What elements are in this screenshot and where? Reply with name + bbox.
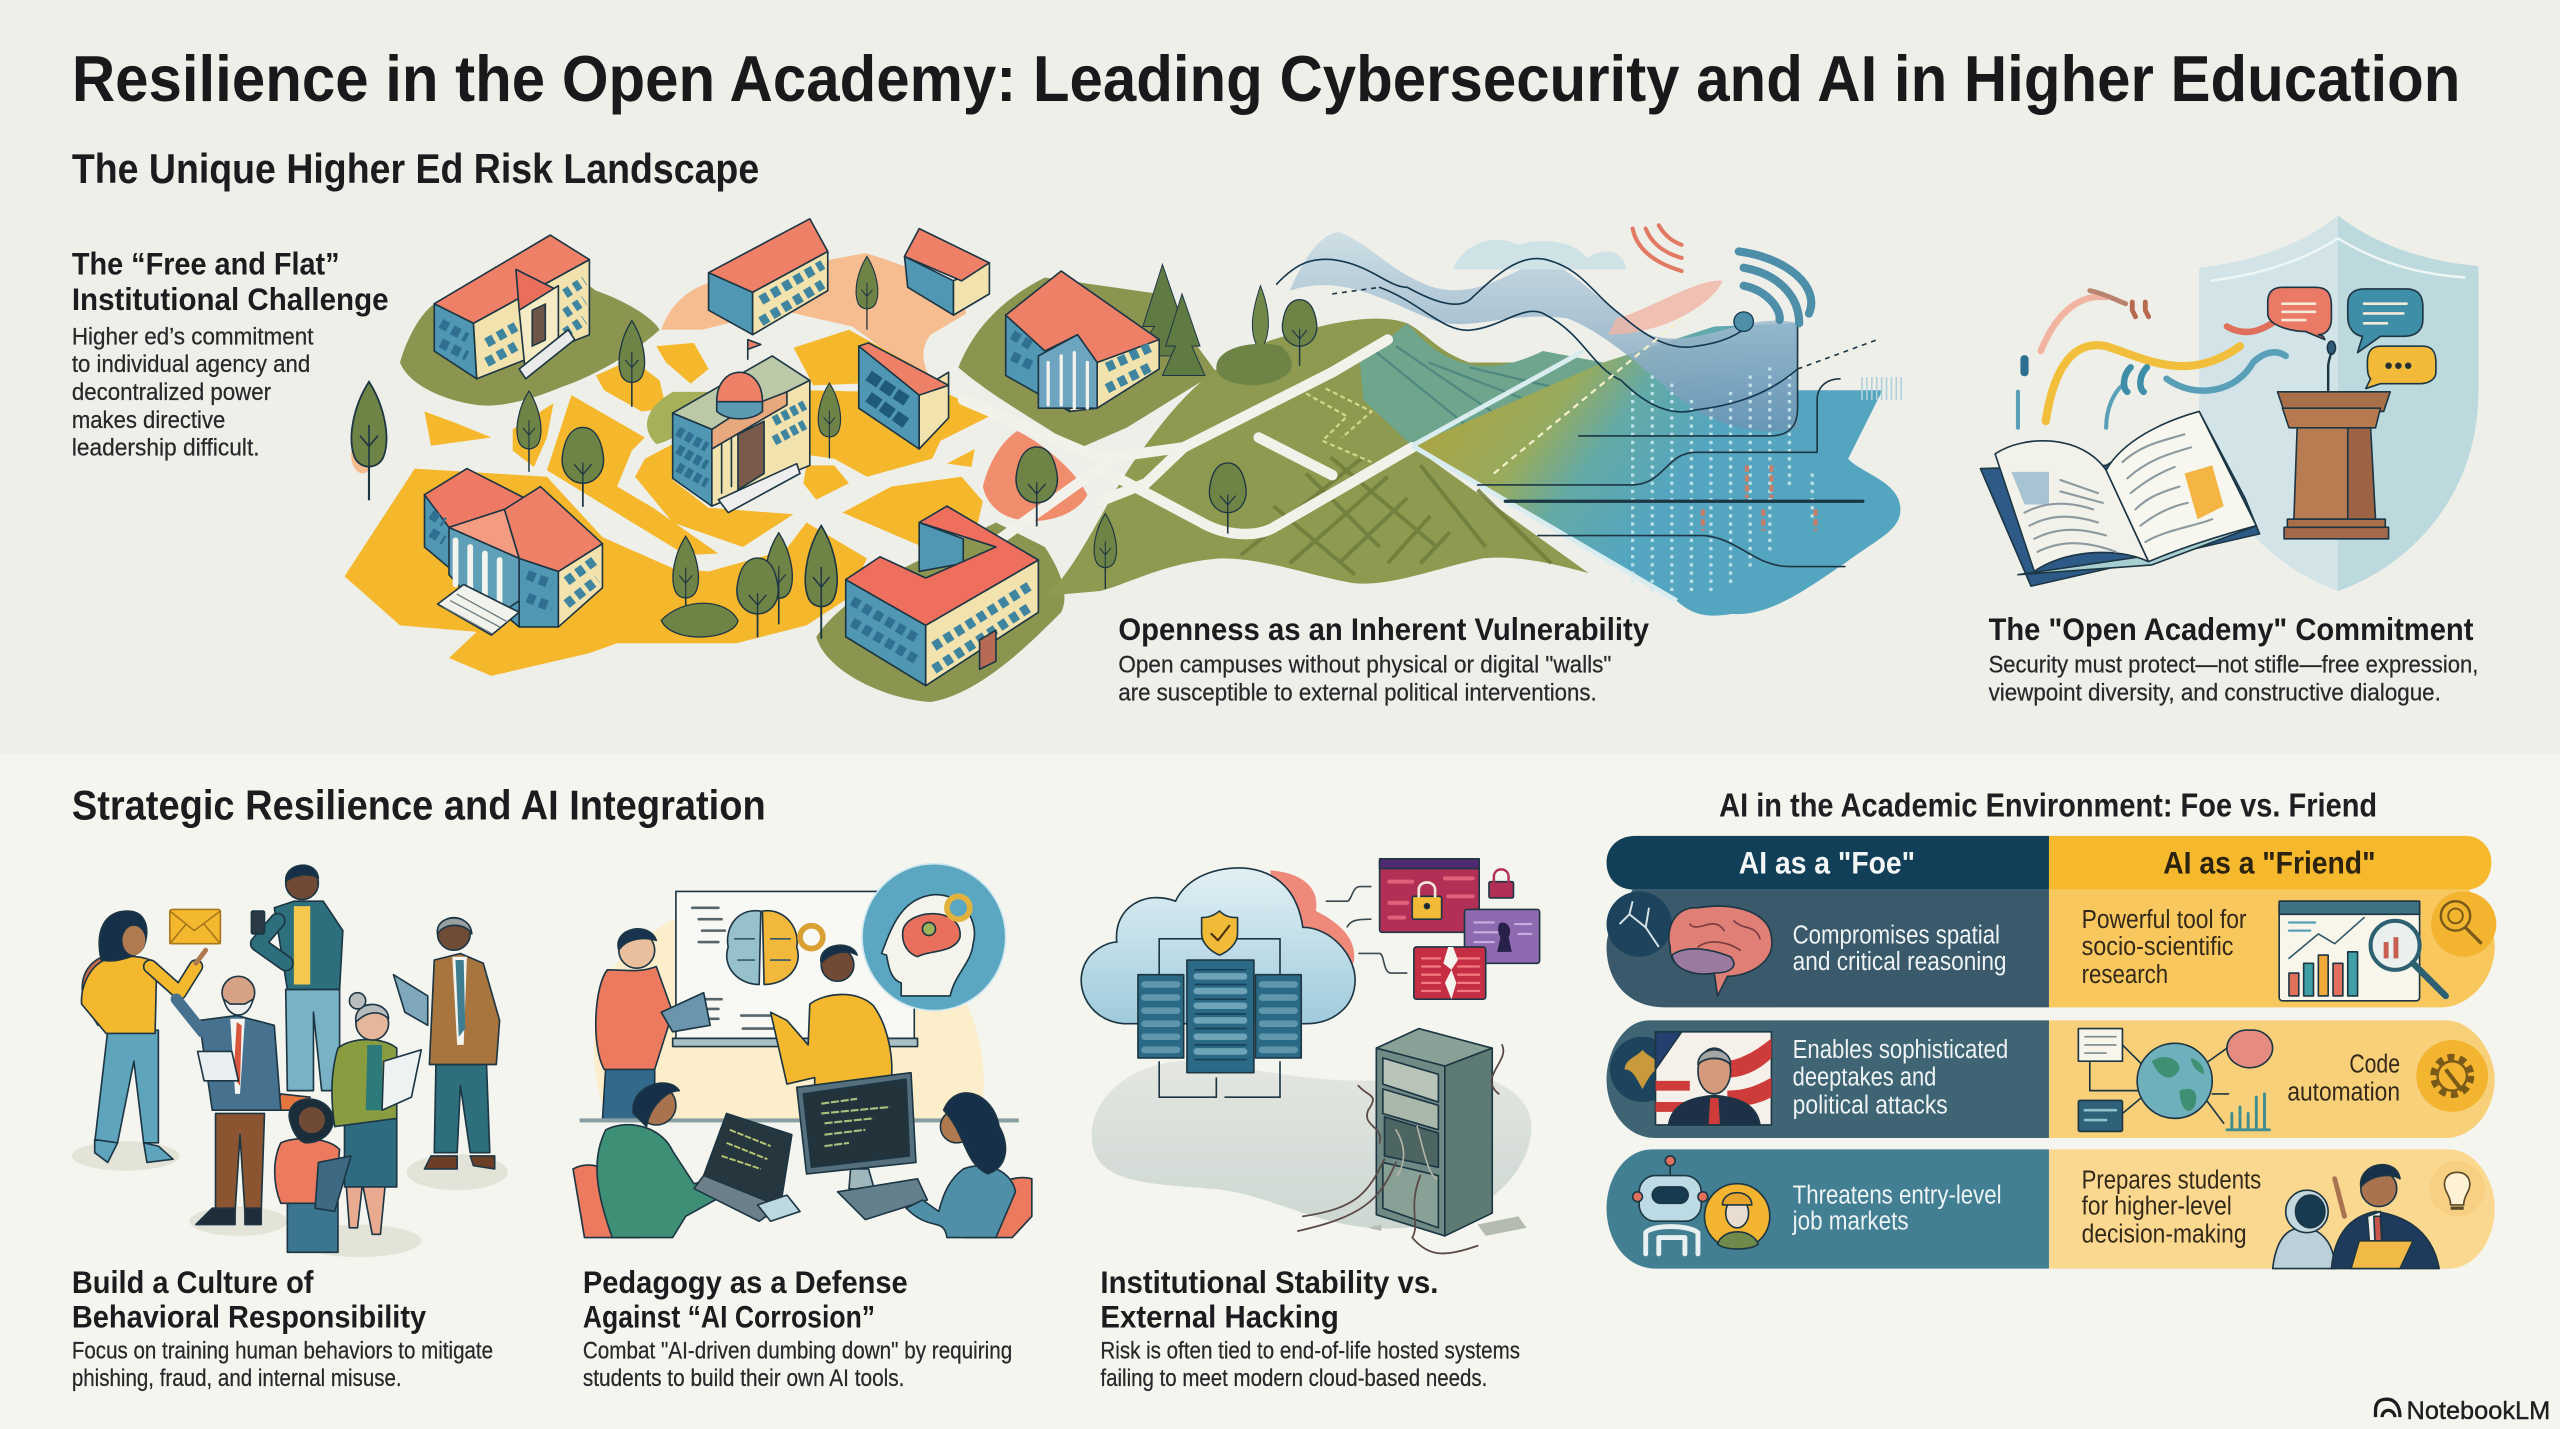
row 2: deeptakes and: [1793, 1064, 1936, 1092]
icon: deepfake portrait: [1656, 1032, 1771, 1125]
open book: [1980, 411, 2260, 586]
red cloud behind: [1270, 870, 1354, 980]
park roads: [963, 340, 1412, 542]
green hoodie student: [597, 1083, 718, 1238]
AI head badge: [862, 864, 1006, 1011]
comparison table: AI foe vs friend: [1607, 836, 2496, 1269]
wifi signal arcs: [1633, 225, 1811, 331]
NotebookLM logo: NotebookLM: [2407, 1397, 2550, 1425]
row 1: research: [2082, 961, 2168, 989]
grey ground blob: [1092, 1060, 1531, 1228]
speech bubbles: [2268, 287, 2436, 389]
girl in coral: [275, 1099, 351, 1252]
text block: open academy commitment: The "Open Academy" Commitment: [1989, 611, 2474, 647]
text block: behavioral responsibility: Behavioral Responsibility: [72, 1298, 426, 1334]
row 2: Code: [2349, 1051, 2400, 1079]
text block: openness as vulnerability: are susceptible to external political interventions.: [1118, 679, 1597, 706]
servers: [1138, 960, 1301, 1073]
olive ground patches: [400, 261, 1216, 702]
illustration: cloud versus legacy server: [1081, 859, 1540, 1253]
icon: gear: [2416, 1040, 2488, 1112]
yellow ground patches: [344, 330, 993, 676]
text block: pedagogy as defense: Against “AI Corrosion”: [583, 1298, 875, 1334]
whiteboard: [673, 891, 918, 1047]
text block: pedagogy as defense: Pedagogy as a Defense: [583, 1264, 908, 1300]
building: temple hall: [424, 469, 602, 635]
desktop monitor with code: [797, 1073, 916, 1192]
row 3: for higher-level: [2082, 1193, 2232, 1221]
purple keyhole window: [1464, 909, 1540, 963]
peach and coral ground: [661, 253, 967, 389]
icon: research chart: [2279, 901, 2446, 1001]
data lines: [1277, 259, 1878, 567]
building: east block: [859, 343, 949, 449]
icon: eagle seal: [1610, 1037, 1675, 1102]
text block: free and flat challenge: leadership difficult.: [72, 435, 260, 462]
row 3: Threatens entry-level: [1793, 1181, 2002, 1209]
row 2: [1607, 1020, 2495, 1138]
warm backdrop: [594, 891, 984, 1120]
woman at keyboard: [906, 1093, 1016, 1238]
row 3: job markets: [1792, 1207, 1909, 1235]
olive landscape hills: [1045, 319, 1603, 596]
binary rain dots: [1633, 367, 1812, 596]
signal dashes red: [1703, 465, 1816, 531]
text block: free and flat challenge: [72, 245, 389, 462]
row 1: Compromises spatial: [1793, 922, 2000, 950]
desk line: [580, 1118, 1019, 1122]
row 1: and critical reasoning: [1793, 948, 2007, 976]
row 1: [1607, 890, 2496, 1007]
icon: neural tree: [1607, 891, 1672, 957]
text block: institutional stability: [1100, 1264, 1520, 1392]
icon: worker: [1704, 1184, 1770, 1249]
flowing digital data region: [1412, 323, 1900, 616]
row 2: automation: [2287, 1078, 2400, 1106]
text block: institutional stability: Institutional Stability vs.: [1100, 1264, 1438, 1300]
envelope icon: [170, 909, 220, 944]
table header: AI as a "Foe": [1739, 845, 1915, 880]
text block: behavioral responsibility: [72, 1264, 493, 1392]
heading: strategic resilience: Strategic Resilience and AI Integration: [72, 782, 766, 829]
table header: [1607, 836, 2491, 890]
connector frames: [1159, 939, 1280, 1097]
building: domed central hall: [673, 340, 810, 513]
illustration: campus map dissolving into data: [344, 219, 1902, 702]
security shield check: [1202, 911, 1238, 955]
text block: open academy commitment: [1989, 611, 2478, 706]
text block: behavioral responsibility: Focus on training human behaviors to mitigate: [72, 1337, 493, 1364]
icon: magnifier: [2431, 891, 2496, 957]
chairs: [573, 1165, 1032, 1238]
row 1: socio-scientific: [2082, 933, 2234, 961]
row 3: [1607, 1149, 2495, 1269]
row 3: Prepares students: [2082, 1167, 2261, 1195]
swirling speech ribbons: [2018, 291, 2286, 428]
man in brown jacket with tablet: [393, 918, 500, 1169]
building: north hall: [709, 219, 828, 335]
building: small cottage: [904, 229, 989, 315]
background: lower section: [0, 754, 2560, 1429]
elder in blue jacket: [176, 976, 281, 1224]
trees: [351, 256, 1317, 639]
text block: free and flat challenge: decontralized power: [72, 379, 271, 406]
text block: free and flat challenge: The “Free and Flat”: [72, 245, 340, 281]
heading: foe vs friend table: AI in the Academic Environment: Foe vs. Friend: [1719, 787, 2377, 824]
illustration: shield, book and podium: [1980, 216, 2478, 591]
text block: institutional stability: Risk is often tied to end-of-life hosted systems: [1100, 1337, 1520, 1364]
row 2: political attacks: [1793, 1091, 1948, 1119]
text block: open academy commitment: viewpoint diversity, and constructive dialogue.: [1989, 679, 2441, 706]
icon: brain: [1669, 906, 1772, 996]
woman in yellow with backpack: [81, 911, 206, 1162]
text block: pedagogy as defense: [583, 1264, 1012, 1392]
cloud: [1081, 868, 1355, 1024]
logo mark: [2376, 1399, 2400, 1417]
crimson locked window: [1380, 859, 1479, 932]
illustration: people collaborating: [72, 865, 508, 1257]
icon: robot and manager: [2273, 1165, 2439, 1269]
teal striped terrain: [1360, 323, 1603, 447]
student pointing in yellow: [771, 945, 892, 1127]
row 2: Enables sophisticated: [1793, 1036, 2008, 1064]
text block: pedagogy as defense: students to build their own AI tools.: [583, 1365, 904, 1392]
older woman in green: [332, 993, 421, 1234]
keyboard and phone: [758, 1179, 927, 1221]
connector wires: [1326, 887, 1407, 973]
ground shadows: [72, 1141, 508, 1257]
text block: openness as vulnerability: Open campuses without physical or digital "walls": [1118, 652, 1611, 679]
text block: openness as vulnerability: Openness as an Inherent Vulnerability: [1118, 611, 1649, 647]
building: columned east hall: [1006, 271, 1159, 411]
text block: free and flat challenge: Institutional Challenge: [72, 281, 389, 317]
text block: pedagogy as defense: Combat "AI-driven dumbing down" by requiring: [583, 1337, 1012, 1364]
background: upper section: [0, 0, 2560, 754]
split brain: [727, 911, 823, 984]
text block: free and flat challenge: makes directive: [72, 407, 225, 434]
icon: robot: [1633, 1156, 1708, 1254]
icon: light bulb: [2429, 1161, 2485, 1216]
podium with microphone: [2278, 341, 2390, 539]
red cracked window: [1414, 947, 1486, 999]
illustration: classroom coding with AI: [573, 864, 1032, 1238]
farm field lines: [1241, 457, 1551, 575]
row 3: decision-making: [2082, 1220, 2247, 1248]
hooded student with laptop: [596, 929, 710, 1120]
data stream edge: [1412, 351, 1677, 601]
standing person with phone: [251, 865, 343, 1110]
text block: openness as vulnerability: [1118, 611, 1649, 706]
text block: open academy commitment: Security must protect—not stifle—free expression,: [1989, 652, 2478, 679]
text block: behavioral responsibility: phishing, fraud, and internal misuse.: [72, 1365, 402, 1392]
text block: institutional stability: failing to meet modern cloud-based needs.: [1100, 1365, 1487, 1392]
building: northwest hall: [434, 235, 589, 379]
table header: AI as a "Friend": [2163, 845, 2376, 880]
heading: risk landscape: The Unique Higher Ed Risk Landscape: [72, 145, 759, 192]
building: L-shaped south hall: [846, 506, 1038, 686]
text block: institutional stability: External Hacking: [1100, 1298, 1339, 1334]
text block: behavioral responsibility: Build a Culture of: [72, 1264, 314, 1300]
text block: free and flat challenge: Higher ed’s commitment: [72, 323, 314, 350]
row 1: Powerful tool for: [2082, 906, 2247, 934]
laptop with code: [694, 1113, 792, 1221]
text block: free and flat challenge: to individual agency and: [72, 351, 310, 378]
end-of-life rack: [1298, 1029, 1527, 1253]
shield: [2199, 216, 2478, 591]
icon: globe network: [2078, 1029, 2273, 1131]
small padlock: [1489, 869, 1513, 898]
